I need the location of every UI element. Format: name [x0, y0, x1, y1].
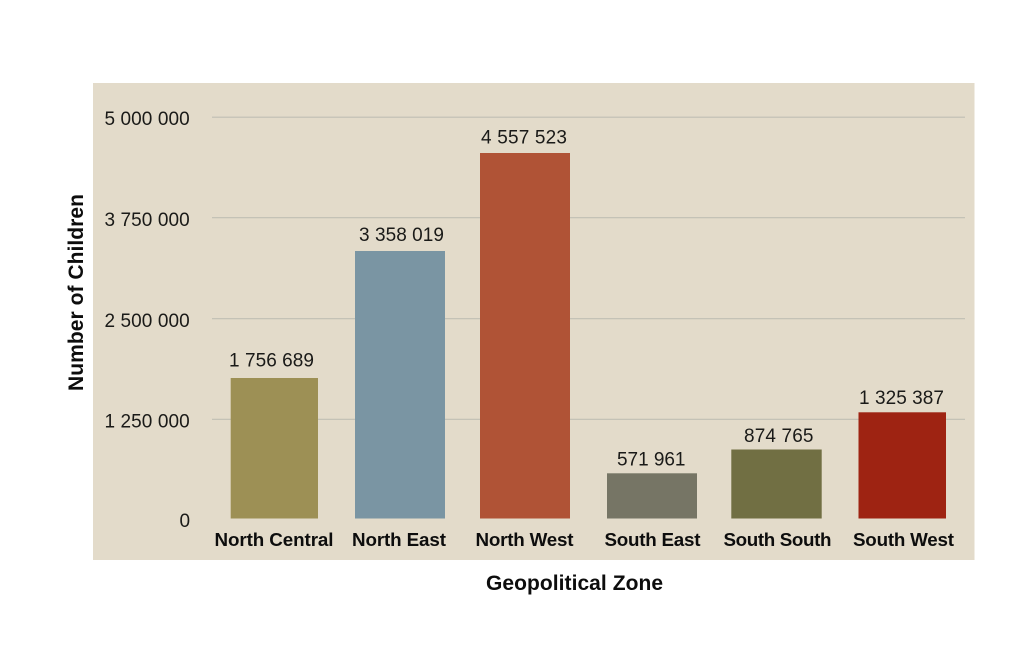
- x-axis category labels: North East: [352, 529, 447, 550]
- y-axis tick labels: 3 750 000: [104, 210, 190, 231]
- bar: North East: [355, 225, 445, 518]
- bar: North Central: [229, 350, 318, 518]
- y-axis title: Number of Children: [65, 194, 88, 391]
- panel: chart background: [93, 83, 974, 560]
- x-axis category labels: [214, 529, 955, 550]
- bar: North West: 4 557 523: [481, 128, 567, 148]
- y-axis tick labels: 2 500 000: [104, 311, 190, 332]
- y-axis tick labels: 1 250 000: [104, 411, 190, 432]
- x-axis category labels: South West: [853, 529, 955, 550]
- x-axis title: Geopolitical Zone: [486, 572, 663, 595]
- bar: North East: 3 358 019: [359, 225, 444, 246]
- y-axis tick labels: 0: [180, 511, 190, 532]
- bar: South South: 874 765: [744, 426, 814, 447]
- y-axis tick labels: [104, 109, 190, 532]
- x-axis category labels: North West: [476, 529, 574, 550]
- x-axis category labels: North Central: [214, 529, 334, 550]
- bar: North Central: 1 756 689: [229, 350, 314, 372]
- y-axis tick labels: 5 000 000: [104, 109, 190, 130]
- bar: South West: [858, 388, 946, 518]
- bar: South West: 1 325 387: [859, 388, 944, 409]
- bar: South East: 571 961: [617, 449, 686, 470]
- bar: South East: [607, 449, 697, 518]
- bar: North West: [480, 128, 570, 518]
- x-axis category labels: South South: [724, 529, 832, 550]
- x-axis category labels: South East: [604, 529, 701, 550]
- bar: South South: [731, 426, 822, 518]
